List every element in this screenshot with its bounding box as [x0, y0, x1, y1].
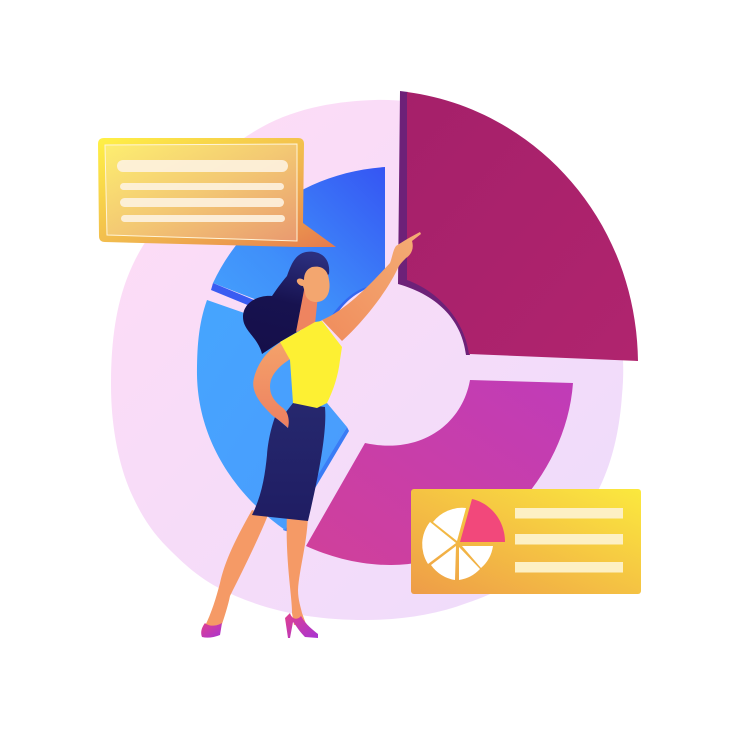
bubble text lines — [117, 160, 288, 222]
chart segment: maroon — [398, 91, 638, 361]
yellow shirt — [280, 321, 342, 408]
skirt — [252, 403, 325, 521]
chart segment: lower blue — [197, 300, 349, 532]
face — [297, 267, 330, 302]
right shoe — [285, 613, 318, 638]
card: speech bubble — [98, 138, 336, 247]
bubble body with tail — [98, 138, 336, 247]
card: pie summary — [411, 489, 641, 594]
left arm on hip — [253, 342, 292, 428]
raised arm — [322, 232, 421, 341]
chart segment: magenta — [306, 380, 573, 565]
back hair — [243, 252, 329, 354]
background blob — [111, 100, 623, 620]
figure: woman pointing — [201, 232, 421, 638]
left shoe — [201, 623, 222, 638]
bubble inner panel — [105, 144, 297, 241]
legs — [204, 510, 268, 628]
chart segment: upper blue — [211, 167, 385, 330]
card background — [411, 489, 641, 594]
neck — [296, 285, 318, 332]
mini pie chart — [422, 499, 505, 580]
summary text lines — [515, 508, 623, 572]
